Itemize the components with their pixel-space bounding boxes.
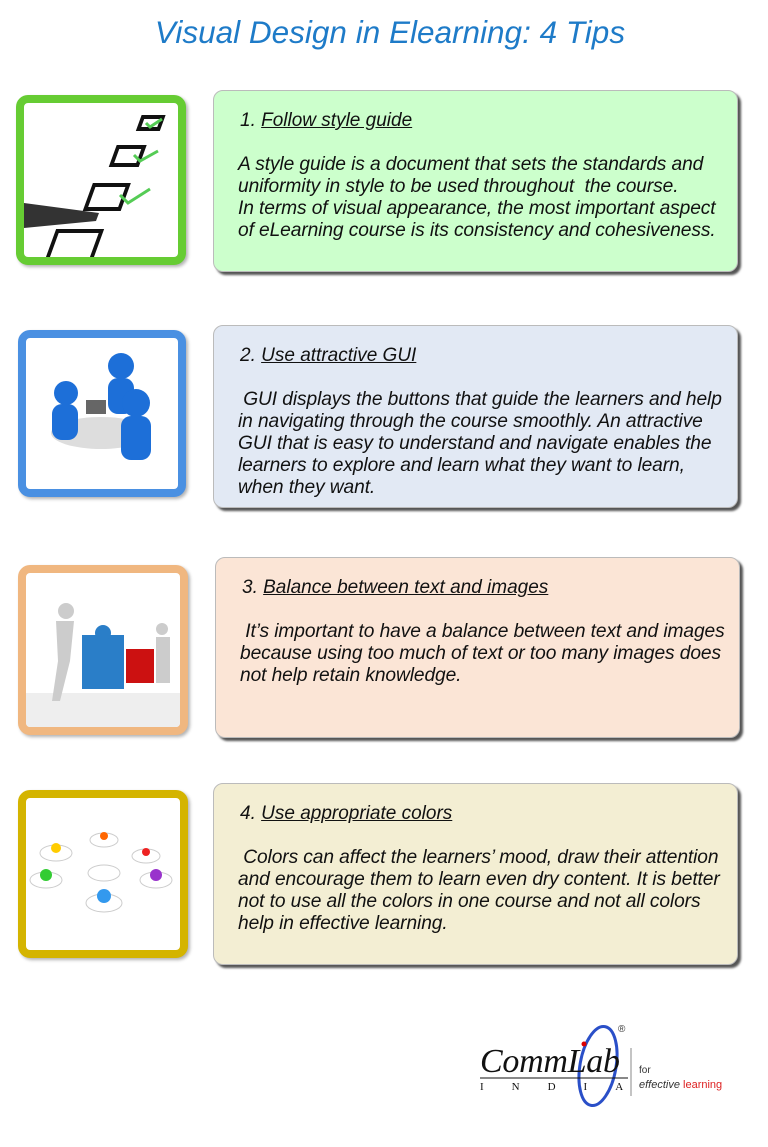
heading 1: 1. Follow style guide	[240, 110, 412, 131]
logo: CommLab India: INDIA	[480, 1081, 651, 1093]
body 2: GUI displays the buttons that guide the learners and help	[243, 389, 722, 410]
body 1: uniformity in style to be used throughout the course.	[238, 176, 678, 197]
body 4	[238, 847, 720, 934]
panel 1 text box	[213, 90, 738, 272]
title: Visual Design in Elearning: 4 Tips	[155, 14, 625, 50]
panel 3 image: puzzle	[18, 565, 188, 735]
body 1: A style guide is a document that sets the standards and	[238, 154, 703, 175]
body 2: learners to explore and learn what they want to learn,	[238, 455, 685, 476]
logo: CommLab India: effective learning	[639, 1079, 722, 1091]
logo: CommLab India: for	[639, 1065, 651, 1076]
heading 4: 4. Use appropriate colors	[240, 803, 452, 824]
body 1: of eLearning course is its consistency and cohesiveness.	[238, 220, 716, 241]
panel 4 text box	[213, 783, 738, 965]
logo: CommLab India	[480, 1024, 722, 1107]
panel 1 image: checklist	[16, 95, 186, 265]
logo: CommLab India: ®	[618, 1024, 626, 1035]
logo: CommLab India: CommLab	[480, 1043, 620, 1080]
body 4: help in effective learning.	[238, 913, 448, 934]
body 4: Colors can affect the learners’ mood, draw their attention	[243, 847, 718, 868]
body 1: In terms of visual appearance, the most important aspect	[238, 198, 716, 219]
body 3: not help retain knowledge.	[240, 665, 461, 686]
panel 2 image: people at table	[18, 330, 186, 497]
body 4: not to use all the colors in one course and not all colors	[238, 891, 700, 912]
body 2	[238, 389, 722, 498]
heading 3: 3. Balance between text and images	[242, 577, 548, 598]
body 1	[237, 154, 716, 241]
panel 3 text box	[215, 557, 740, 738]
body 2: when they want.	[238, 477, 375, 498]
body 2: in navigating through the course smoothly. An attractive	[238, 411, 703, 432]
body 3: because using too much of text or too many images does	[240, 643, 721, 664]
body 3: It’s important to have a balance between text and images	[245, 621, 725, 642]
body 4: and encourage them to learn even dry content. It is better	[238, 869, 720, 890]
body 2: GUI that is easy to understand and navigate enables the	[238, 433, 711, 454]
body 3	[240, 621, 725, 686]
panel 4 image: colored people network	[18, 790, 188, 958]
panel 2 text box	[213, 325, 738, 508]
heading 2: 2. Use attractive GUI	[240, 345, 416, 366]
